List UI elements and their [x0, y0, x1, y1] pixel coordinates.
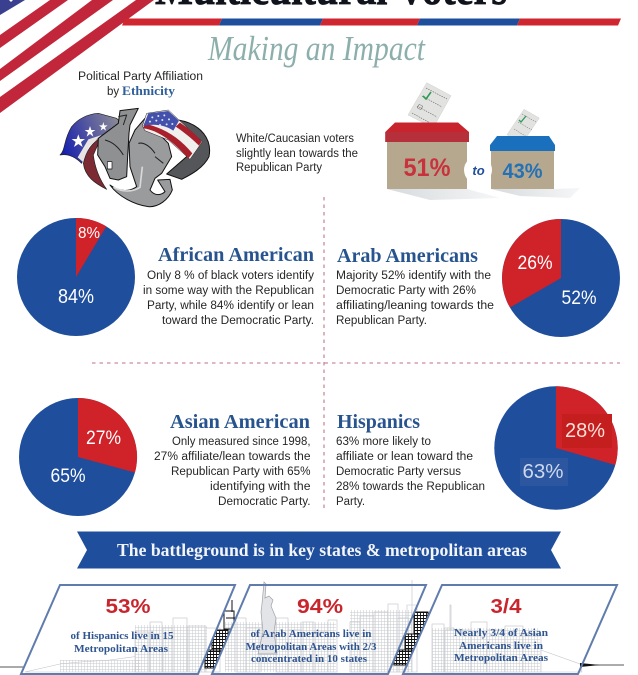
stat panel: Asian Americans: 3/4: [490, 596, 522, 618]
pie chart: Arab Americans: 52%: [562, 288, 597, 309]
description: 63% more likely to: [336, 436, 431, 448]
text: white/caucasian voters: slightly lean towards the: [236, 148, 358, 160]
pie chart: Asian American: 27%: [86, 428, 121, 449]
stat panel: Hispanics: of Hispanics live in 15: [70, 630, 174, 642]
description: 27% affiliate/lean towards the: [154, 451, 310, 463]
panel: Asian American: [19, 398, 310, 516]
waterline marks: [0, 666, 24, 668]
description: affiliating/leaning towards the: [336, 300, 494, 312]
pie chart: Asian American: [19, 398, 137, 516]
title rule: [122, 18, 621, 26]
statue of liberty: [258, 582, 277, 654]
description: toward the Democratic Party.: [162, 315, 314, 327]
description: Democratic Party.: [218, 496, 310, 508]
icon: ballot boxes: 43%: [502, 160, 543, 183]
window texture: [60, 610, 540, 672]
heading: Hispanics: [337, 411, 420, 433]
stat panel: Asian Americans: [403, 585, 617, 674]
subtitle: Making an Impact: [207, 29, 426, 68]
stat panel: Hispanics: Metropolitan Areas: [74, 643, 169, 655]
tusk: [113, 167, 142, 191]
panel: Arab Americans: [336, 219, 620, 337]
pie chart: Hispanics: 63%: [522, 461, 564, 483]
flag corner: [0, 0, 160, 115]
to: [464, 156, 492, 184]
text: white/caucasian voters: White/Caucasian voters: [236, 133, 354, 145]
text: white/caucasian voters: Republican Party: [236, 162, 322, 174]
pie chart: Arab Americans: [502, 219, 620, 337]
heading: political party affiliation: [78, 71, 203, 98]
stat panel: Hispanics: [21, 585, 235, 674]
description: Party, while 84% identify or lean: [147, 300, 314, 312]
description: Majority 52% identify with the: [336, 270, 491, 282]
stat panel: Asian Americans: Americans live in: [459, 640, 543, 652]
stat panel: Hispanics: 53%: [106, 596, 151, 618]
banner: The battleground is in key states & metropolitan areas: [117, 540, 527, 560]
dashed dividers: [92, 197, 620, 510]
stat panel: Arab Americans: Metropolitan Areas with 2/3: [246, 641, 377, 653]
description: 28% towards the Republican: [336, 481, 485, 493]
elephant head and trunk: [110, 118, 172, 207]
mane stars: [72, 122, 117, 147]
white stripe: [78, 135, 102, 162]
description: Party.: [336, 496, 365, 508]
stat panel: Arab Americans: 94%: [297, 596, 343, 618]
icon: ballot boxes: 51%: [404, 154, 450, 182]
heading: Asian American: [170, 411, 310, 433]
stat panel: Arab Americans: of Arab Americans live in: [250, 628, 372, 640]
donkey forelock: [83, 138, 107, 189]
heading: political party affiliation: Political Party Affiliation: [78, 71, 203, 83]
pie chart: African American: 8%: [78, 225, 100, 242]
elephant ear: [167, 120, 210, 179]
donkey mane: [60, 113, 123, 163]
description: [143, 270, 314, 327]
description: identifying with the: [210, 481, 310, 493]
heading: Arab Americans: [337, 245, 478, 267]
dark towers in gap two: [394, 612, 428, 665]
pie chart: Asian American: 65%: [50, 466, 86, 487]
pie chart: African American: [17, 218, 135, 336]
description: [336, 270, 494, 327]
description: Democratic Party versus: [336, 466, 461, 478]
panel: African American: [17, 218, 314, 336]
description: Democratic Party with 26%: [336, 285, 476, 297]
donkey head: [98, 108, 138, 180]
stat panel: Asian Americans: Metropolitan Areas: [454, 652, 549, 664]
blue ballot: [507, 109, 539, 143]
text: white/caucasian voters: [236, 133, 358, 174]
banner: [77, 532, 561, 568]
stat panel: Arab Americans: [212, 585, 426, 674]
pie chart: Hispanics: 28%: [565, 420, 605, 442]
icon: ballot boxes: [385, 83, 580, 200]
skyline illustration: [0, 580, 624, 672]
to: to: [472, 163, 485, 178]
panel: Hispanics: [336, 386, 618, 510]
description: Only measured since 1998,: [172, 436, 310, 448]
icon: donkey and elephant mascots: [60, 108, 210, 207]
description: in some way with the Republican: [143, 285, 314, 297]
pie chart: African American: 84%: [58, 286, 94, 308]
heading: African American: [158, 244, 314, 266]
pie chart: Arab Americans: 26%: [518, 253, 553, 274]
description: Only 8 % of black voters identify: [147, 270, 314, 282]
elephant flag: [142, 110, 202, 159]
description: Republican Party.: [336, 315, 427, 327]
heading: political party affiliation: by: [107, 86, 119, 98]
description: [154, 436, 310, 508]
stat panel: Asian Americans: Nearly 3/4 of Asian: [454, 627, 548, 639]
dark towers in gap one: [205, 600, 236, 668]
red ballot: [408, 83, 451, 128]
description: affiliate or lean toward the: [336, 451, 473, 463]
description: [336, 436, 485, 508]
pie chart: Hispanics: [494, 386, 618, 510]
description: Republican Party with 65%: [171, 466, 310, 478]
stat panel: Arab Americans: concentrated in 10 states: [251, 653, 368, 665]
heading: political party affiliation: Ethnicity: [122, 84, 176, 98]
